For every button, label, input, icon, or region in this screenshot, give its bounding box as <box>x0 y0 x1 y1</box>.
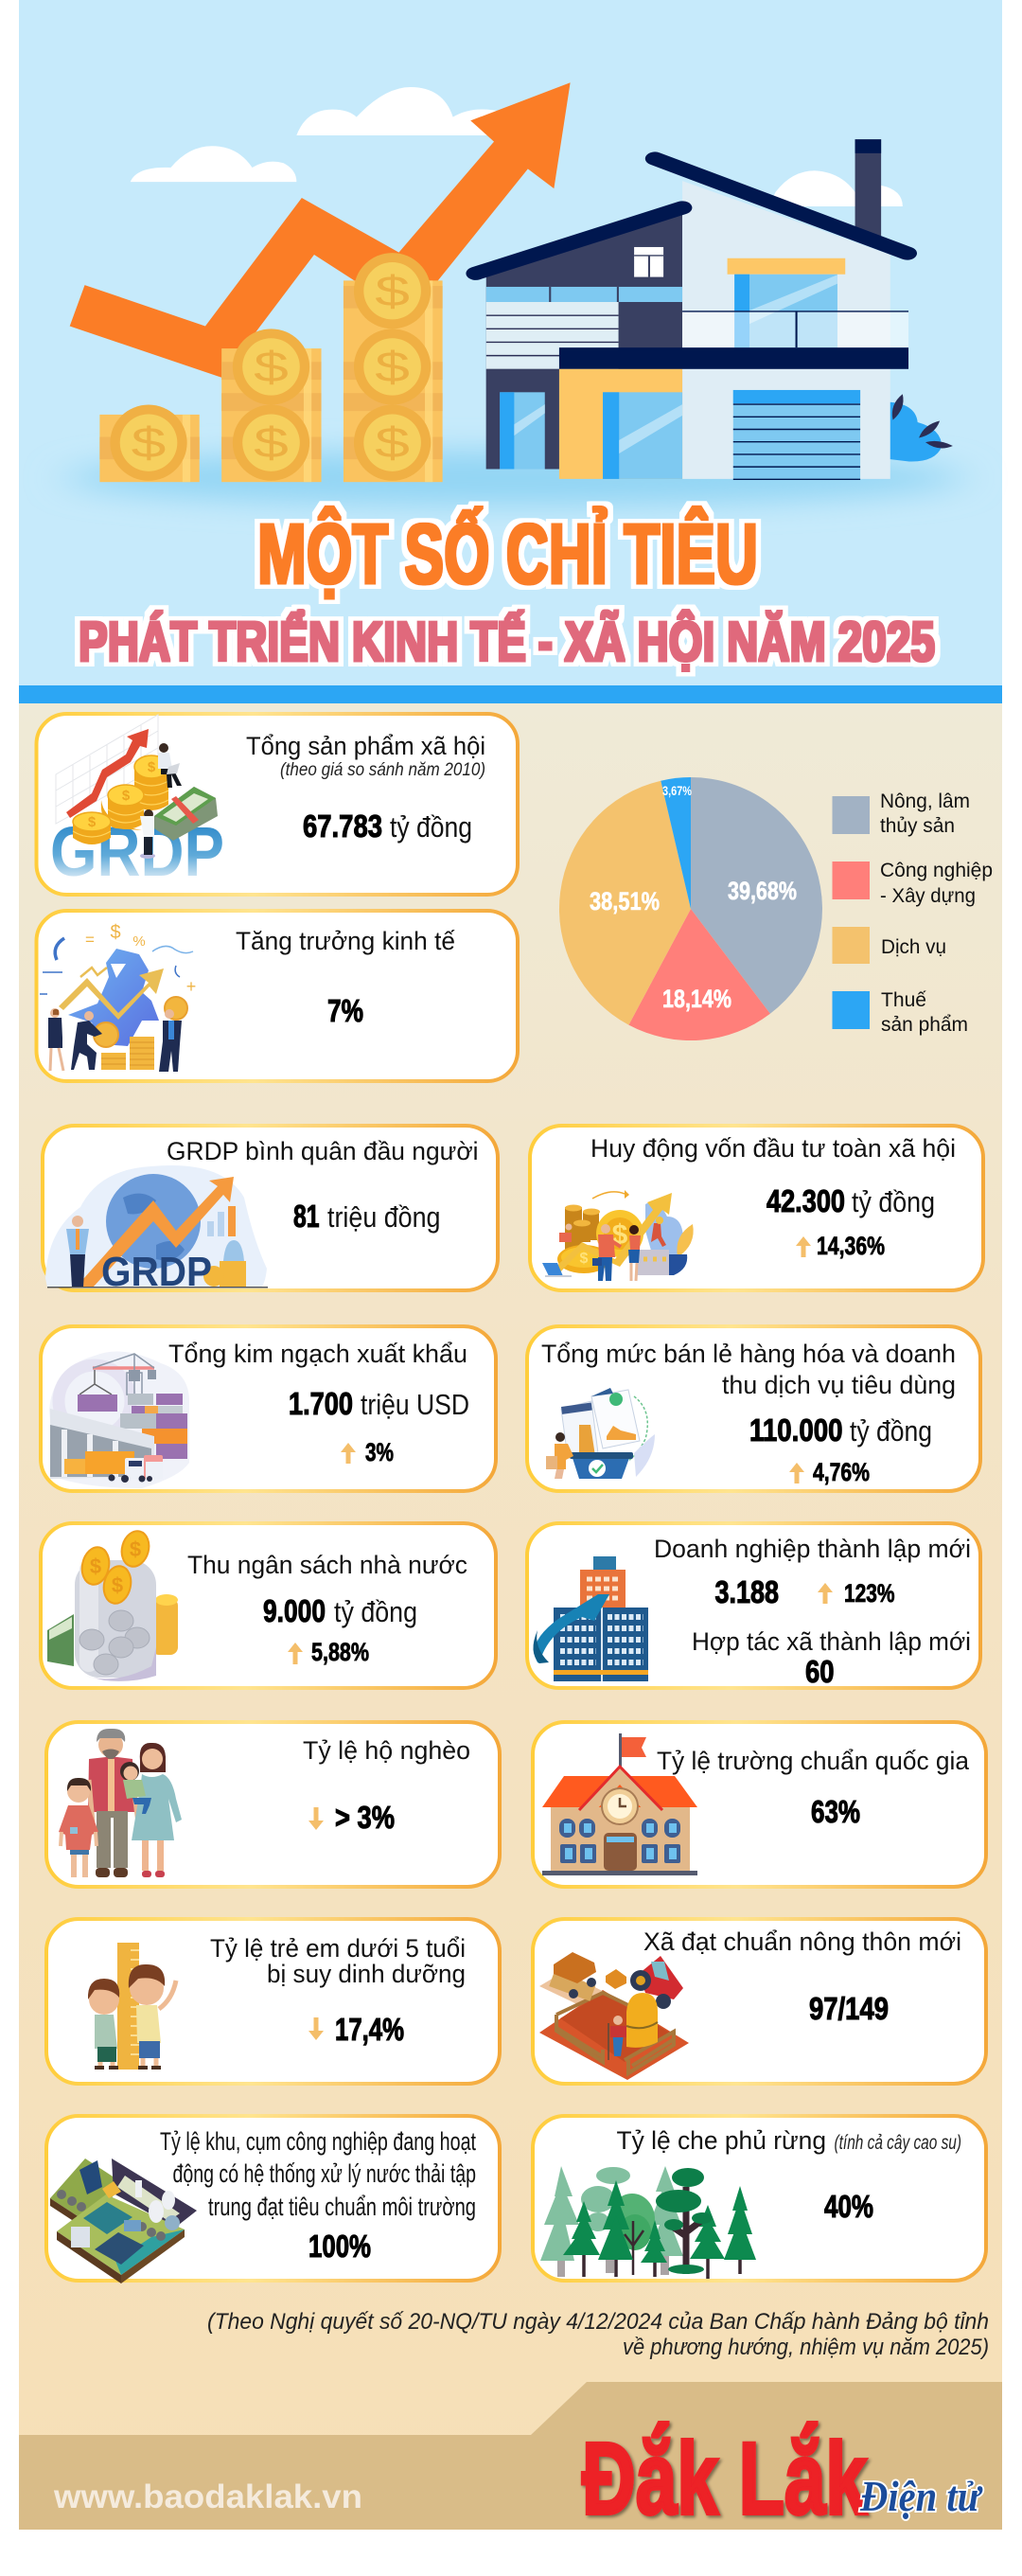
icon: clouds <box>131 87 903 206</box>
text: heading: Tăng trưởng kinh tế <box>236 927 455 955</box>
icon: coin stacks: $ <box>375 268 410 315</box>
icon: GRDP coins chart: $ <box>148 759 156 775</box>
panel: child malnutrition <box>46 1919 500 2084</box>
text: value: tỷ đồng <box>334 1595 417 1628</box>
legend: - Xây dựng <box>880 885 976 907</box>
text: change: 5,88% <box>311 1638 369 1666</box>
text: value: 7% <box>327 993 363 1028</box>
text: value: 42.300 <box>766 1183 845 1218</box>
icon: investment: $ <box>612 1219 628 1251</box>
text: heading: động có hệ thống xử lý nước thải tập <box>172 2159 476 2188</box>
title <box>79 506 935 673</box>
icon: GRDP globe: GRDP <box>101 1249 212 1295</box>
text: heading: Huy động vốn đầu tư toàn xã hội <box>590 1134 956 1163</box>
source note <box>207 2309 989 2360</box>
panel: new enterprises <box>527 1523 980 1689</box>
text: change: 3% <box>365 1438 394 1466</box>
text: value: 81 <box>293 1199 320 1234</box>
text: heading <box>617 2126 961 2155</box>
pie labels: 18,14% <box>662 985 731 1013</box>
text: heading: Tỷ lệ trẻ em dưới 5 tuổi <box>210 1934 466 1963</box>
pie chart <box>559 777 822 1040</box>
icon: up arrow <box>796 1236 811 1257</box>
text: value <box>303 808 472 844</box>
panel: industrial wastewater <box>46 2116 500 2283</box>
icon: family <box>59 1729 182 1877</box>
text: heading: trung đạt tiêu chuẩn môi trường <box>208 2193 476 2221</box>
text: heading <box>541 1340 956 1399</box>
text: note: (theo giá so sánh năm 2010) <box>280 760 485 780</box>
icon: buildings <box>533 1556 648 1681</box>
panel: GRDP per capita <box>43 1126 498 1295</box>
text: value <box>263 1593 417 1628</box>
text: change: 14,36% <box>817 1232 885 1260</box>
text: heading: Tỷ lệ trường chuẩn quốc gia <box>657 1747 970 1775</box>
legend: Nông, lâm <box>880 791 970 812</box>
text: change: 123% <box>844 1579 895 1608</box>
text: heading: Tổng mức bán lẻ hàng hóa và doanh <box>541 1340 956 1368</box>
icon: growth team: = <box>85 931 95 949</box>
icon: growth team <box>40 922 196 1072</box>
text: heading: Tổng sản phẩm xã hội <box>246 732 485 760</box>
text: heading: Tỷ lệ hộ nghèo <box>303 1736 470 1765</box>
panel: exports <box>41 1326 496 1491</box>
text: value <box>289 1386 469 1421</box>
icon: up arrow <box>818 1583 833 1604</box>
text: value: tỷ đồng <box>850 1414 932 1448</box>
panel: beige content background <box>19 703 1002 2530</box>
logo: Dak Lak Dien tu: Điện tử <box>859 2472 983 2520</box>
icon: shopping <box>546 1388 655 1479</box>
icon: growth team: % <box>132 933 146 950</box>
panel: forest coverage <box>533 2116 986 2281</box>
text: value: 63% <box>811 1794 860 1829</box>
icon: port containers <box>49 1352 189 1488</box>
icon: coin stacks: $ <box>254 344 289 391</box>
panel: poverty rate <box>46 1722 500 1887</box>
text: heading: Tổng kim ngạch xuất khẩu <box>168 1340 467 1368</box>
text: enterprises value: 3.188 <box>715 1574 779 1609</box>
text: heading: Thu ngân sách nhà nước <box>187 1551 467 1579</box>
text: heading: thu dịch vụ tiêu dùng <box>722 1371 956 1399</box>
icon: coin stacks <box>99 253 443 482</box>
icon: GRDP coins chart: GRDP <box>50 812 224 891</box>
text: value: 1.700 <box>289 1386 353 1421</box>
text: value: 9.000 <box>263 1593 326 1628</box>
text: value: 67.783 <box>303 808 382 844</box>
icon: down arrow <box>308 1807 324 1830</box>
text: heading <box>160 2127 476 2221</box>
panel: sky background <box>19 0 1002 685</box>
icon: growth team: + <box>186 977 196 996</box>
legend: sản phẩm <box>881 1014 968 1036</box>
hero illustration <box>65 82 964 506</box>
icon: treatment plant <box>50 2159 197 2283</box>
text: value: 97/149 <box>809 1991 889 2026</box>
legend: thủy sản <box>880 815 955 837</box>
panel: gross product <box>36 714 518 895</box>
text: value: triệu đồng <box>327 1200 441 1234</box>
footer band <box>19 2382 1002 2530</box>
blue divider band <box>19 685 1002 703</box>
icon: investment: $ <box>580 1251 589 1267</box>
icon: coin stacks: $ <box>132 419 166 468</box>
text: value: tỷ đồng <box>852 1185 935 1218</box>
text: value: > 3% <box>335 1800 395 1835</box>
text: value: triệu USD <box>361 1388 469 1421</box>
icon: GRDP coins chart: $ <box>88 814 97 830</box>
text: value: 100% <box>308 2229 371 2264</box>
icon: down arrow <box>308 2017 324 2040</box>
text: change: 4,76% <box>813 1458 870 1486</box>
icon: children with ruler <box>88 1943 176 2070</box>
icon: coin jar: $ <box>112 1573 123 1597</box>
icon: GRDP coins chart: $ <box>122 788 131 804</box>
source note: về phương hướng, nhiệm vụ năm 2025) <box>623 2335 989 2360</box>
text: value <box>293 1199 441 1234</box>
panel: retail revenue <box>527 1326 980 1491</box>
text: value <box>766 1183 935 1218</box>
icon: forest <box>540 2166 756 2279</box>
icon: up arrow <box>288 1643 303 1664</box>
logo: Dak Lak Dien tu: Đắk Lắk <box>582 2421 868 2535</box>
panel: new rural communes <box>533 1919 986 2084</box>
icon: school <box>542 1733 697 1875</box>
text: heading <box>210 1934 466 1988</box>
pie labels: 3,67% <box>662 783 692 798</box>
text: cooperatives heading: Hợp tác xã thành lập mới <box>692 1627 971 1656</box>
legend: Thuế <box>881 989 926 1011</box>
text: value <box>749 1412 932 1448</box>
text: value: 40% <box>824 2189 873 2224</box>
pie labels: 38,51% <box>590 887 660 915</box>
icon: coin jar <box>47 1528 178 1681</box>
panel: national standard schools <box>533 1722 986 1887</box>
text: enterprises heading: Doanh nghiệp thành lập mới <box>654 1535 971 1563</box>
text: cooperatives value: 60 <box>805 1654 835 1689</box>
icon: up arrow <box>789 1463 804 1483</box>
pie labels <box>590 783 797 1013</box>
text: heading: Tỷ lệ che phủ rừng <box>617 2126 826 2155</box>
panel: investment capital <box>530 1126 983 1290</box>
icon: house <box>476 139 953 479</box>
icon: coin stacks: $ <box>375 419 410 468</box>
legend: Dịch vụ <box>881 936 946 958</box>
icon: investment <box>542 1190 694 1281</box>
text: heading: bị suy dinh dưỡng <box>267 1960 466 1988</box>
panel: economic growth <box>36 911 518 1081</box>
icon: coin stacks: $ <box>375 344 410 391</box>
icon: coin jar: $ <box>130 1537 141 1561</box>
icon: farm <box>539 1952 689 2080</box>
legend <box>833 791 993 1036</box>
text: heading: (tính cả cây cao su) <box>835 2132 961 2154</box>
source note: (Theo Nghị quyết số 20-NQ/TU ngày 4/12/2024 của Ban Chấp hành Đảng bộ tỉnh <box>207 2309 989 2335</box>
panel: state budget <box>41 1523 496 1688</box>
pie labels: 39,68% <box>728 877 797 905</box>
text: value: 17,4% <box>335 2012 404 2047</box>
text: heading: Xã đạt chuẩn nông thôn mới <box>643 1928 961 1956</box>
icon: growth team: $ <box>110 922 121 943</box>
icon: GRDP globe <box>45 1165 268 1295</box>
title line 1: MỘT SỐ CHỈ TIÊU <box>257 506 758 602</box>
text: value: 110.000 <box>749 1412 842 1448</box>
text: heading: Tỷ lệ khu, cụm công nghiệp đang hoạt <box>160 2127 476 2156</box>
icon: coin stacks: $ <box>254 419 289 468</box>
icon: orange growth arrow <box>70 82 571 378</box>
legend: Công nghiệp <box>880 860 993 881</box>
website address: www.baodaklak.vn <box>53 2478 362 2515</box>
text: heading: GRDP bình quân đầu người <box>167 1137 479 1165</box>
text: value: tỷ đồng <box>390 810 472 844</box>
icon: up arrow <box>341 1443 356 1464</box>
icon: GRDP coins chart <box>50 715 224 891</box>
icon: coin jar: $ <box>90 1554 101 1578</box>
